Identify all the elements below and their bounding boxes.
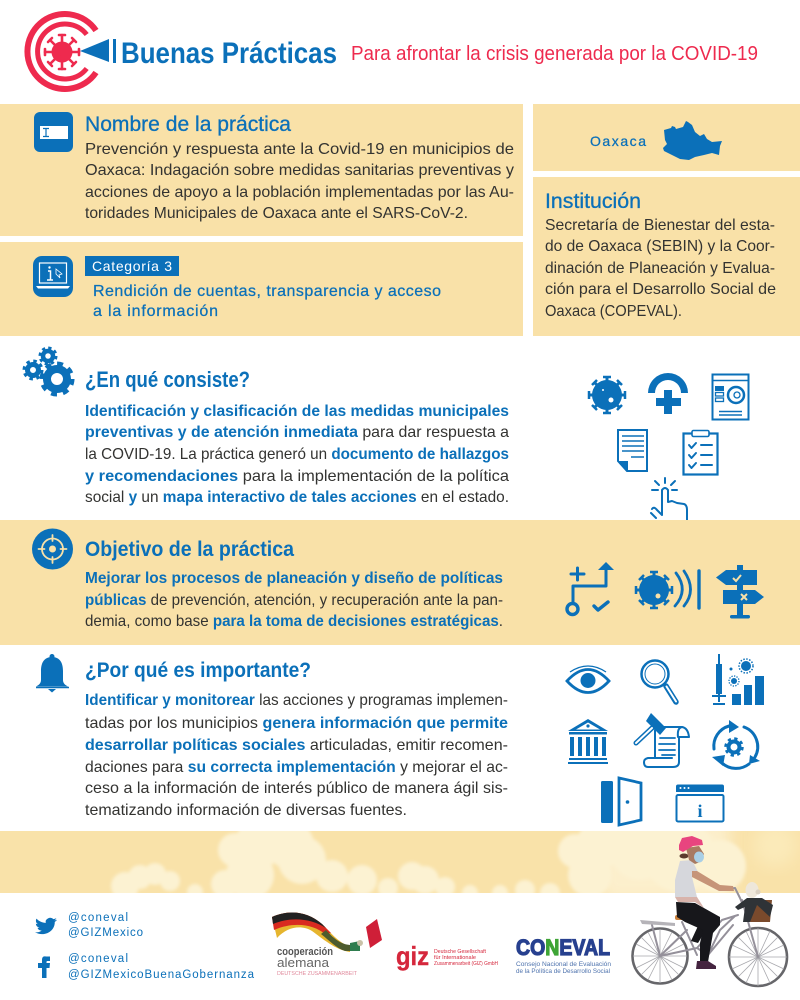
- text: institución body: Secretaría de Bienestar del esta-: [545, 217, 775, 234]
- text: nombre body: toridades Municipales de Oaxaca ante el SARS-CoV-2.: [85, 205, 468, 222]
- logo: giz: Zusammenarbeit (GIZ) GmbH: [434, 961, 498, 967]
- icon: gears: [24, 348, 72, 394]
- text: institución body: Oaxaca (COPEVAL).: [545, 303, 682, 320]
- logo: giz: giz: [396, 941, 429, 971]
- text: en qué consiste body: social y un mapa interactivo de tales acciones en el estado.: [85, 489, 509, 506]
- bicycle rack: [640, 920, 675, 926]
- logo: cooperación alemana: alemana: [277, 955, 330, 970]
- logo: cooperación alemana: DEUTSCHE ZUSAMMENARBEIT: [277, 971, 357, 977]
- heading: objetivo: Objetivo de la práctica: [85, 538, 294, 561]
- text: por qué body: tadas por los municipios genera información que permite: [85, 715, 508, 732]
- illustration: cyclist with dog: [632, 836, 787, 986]
- icon: text field: [34, 112, 73, 152]
- heading: en qué consiste: ¿En qué consiste?: [85, 367, 250, 392]
- icon: document: [618, 430, 647, 471]
- text: objetivo body: Mejorar los procesos de planeación y diseño de políticas: [85, 570, 503, 587]
- icon: info window: [676, 784, 724, 822]
- text: categoría name: Rendición de cuentas, transparencia y acceso: [93, 283, 441, 300]
- icon: magnifier: [642, 660, 676, 702]
- icon: bank: [568, 719, 608, 764]
- icon: open door: [601, 778, 641, 825]
- panel: objetivo: [0, 520, 800, 645]
- icon: virus with waves: [636, 571, 699, 608]
- panel: categoría: [0, 242, 523, 336]
- icon: syringe and chart: [712, 654, 764, 705]
- icon: pointing hand: [651, 478, 687, 520]
- header logo: virus target: [27, 14, 116, 89]
- logo: coneval: [516, 935, 611, 975]
- text: twitter handles: [68, 912, 143, 939]
- icon: gavel and scroll: [636, 713, 689, 767]
- rider shoe: [696, 961, 716, 969]
- text: facebook handles: @coneval: [68, 953, 128, 965]
- icon: Oaxaca map: [663, 121, 722, 160]
- text: por qué body: Identificar y monitorear las acciones y programas implemen-: [85, 692, 508, 709]
- icon: clipboard checklist: [684, 430, 718, 474]
- rider legs: [676, 902, 720, 962]
- icon: bell: [36, 654, 69, 692]
- logo: coneval: Consejo Nacional de Evaluación: [516, 962, 611, 968]
- icon: cycle gear: [712, 720, 760, 768]
- text: institución body: dinación de Planeación y Evalua-: [545, 260, 775, 277]
- logo: giz: [396, 941, 498, 971]
- icon: signpost: [716, 565, 764, 618]
- icon: health cross: [648, 373, 688, 414]
- logo: giz: Deutsche Gesellschaft: [434, 949, 487, 955]
- text: objetivo body: [85, 570, 503, 630]
- text: por qué body: [85, 692, 508, 819]
- heading: nombre: Nombre de la práctica: [85, 113, 291, 136]
- title: Buenas Prácticas: [121, 37, 337, 70]
- sash: [675, 897, 704, 908]
- logo: cooperación alemana: cooperación: [277, 946, 333, 958]
- text: nombre body: [85, 141, 514, 222]
- rider torso: [675, 860, 698, 897]
- panel: Oaxaca: [533, 104, 800, 171]
- text: categoría name: a la información: [93, 303, 218, 320]
- basket and dog: [735, 882, 773, 922]
- logo: coneval: CONEVAL: [516, 935, 610, 960]
- text: nombre body: Oaxaca: Indagación sobre medidas sanitarias preventivas y: [85, 162, 514, 179]
- logo: coneval: de la Política de Desarrollo Social: [516, 969, 610, 975]
- rider arm: [692, 871, 734, 891]
- icon: info window: i: [697, 801, 703, 821]
- rider neck and face: [686, 846, 704, 864]
- icon: route decisions: [567, 562, 614, 614]
- text: twitter handles: @coneval: [68, 912, 128, 924]
- text: facebook handles: @GIZMexicoBuenaGobernanza: [68, 969, 255, 981]
- icon: dashboard: [712, 374, 748, 420]
- icon: eye: [567, 666, 609, 692]
- rear wheel: [632, 928, 688, 984]
- icon: twitter: [35, 918, 57, 934]
- icon: facebook: [38, 956, 50, 978]
- heading: institución: Institución: [545, 190, 641, 213]
- text: nombre body: acciones de apoyo a la población implementadas por las Au-: [85, 184, 514, 201]
- subtitle: Para afrontar la crisis generada por la COVID-19: [351, 43, 758, 65]
- text: categoría name: [93, 283, 441, 320]
- text: institución body: do de Oaxaca (SEBIN) y la Coor-: [545, 238, 775, 255]
- logo: giz: für Internationale: [434, 955, 476, 961]
- bicycle seat: [675, 915, 683, 920]
- text: twitter handles: @GIZMexico: [68, 927, 143, 939]
- front wheel: [729, 928, 787, 986]
- text: objetivo body: públicas de prevención, atención, y recuperación ante la pan-: [85, 592, 503, 609]
- rider back leg: [691, 926, 706, 943]
- text: facebook handles: [68, 953, 255, 981]
- logo: cooperación alemana: [272, 913, 382, 977]
- icon: virus: [589, 377, 625, 413]
- text: en qué consiste body: [85, 403, 509, 506]
- text: en qué consiste body: Identificación y clasificación de las medidas municipales: [85, 403, 509, 420]
- label: Oaxaca: Oaxaca: [590, 133, 646, 149]
- text: por qué body: ceso a la información de interés público de manera ágil sis-: [85, 780, 508, 797]
- icon: target: [32, 528, 73, 570]
- bicycle frame: [652, 888, 758, 957]
- text: en qué consiste body: la COVID-19. La práctica generó un documento de hallazgos: [85, 446, 509, 463]
- text: en qué consiste body: preventivas y de atención inmediata para dar respuesta a: [85, 424, 509, 441]
- face mask: [694, 852, 704, 862]
- heading: por qué es importante: ¿Por qué es importante?: [85, 659, 311, 682]
- label: categoría 3: Categoría 3: [92, 258, 172, 274]
- text: objetivo body: demia, como base para la toma de decisiones estratégicas.: [85, 613, 503, 630]
- text: en qué consiste body: y recomendaciones para la implementación de la política: [85, 468, 509, 485]
- panel: institución: [533, 177, 800, 336]
- panel: cloud band: [0, 831, 800, 893]
- label: categoría 3: [85, 256, 179, 276]
- text: por qué body: daciones para su correcta implementación y mejorar el ac-: [85, 759, 508, 776]
- rider hair: [680, 854, 688, 858]
- text: por qué body: desarrollar políticas sociales articuladas, emitir recomen-: [85, 737, 508, 754]
- panel: nombre de la práctica: [0, 104, 523, 236]
- helmet: [679, 836, 703, 852]
- text: por qué body: tematizando información de diversas fuentes.: [85, 802, 407, 819]
- text: institución body: [545, 217, 776, 320]
- icon: laptop info: [33, 256, 73, 297]
- text: nombre body: Prevención y respuesta ante la Covid-19 en municipios de: [85, 141, 514, 158]
- text: institución body: ción para el Desarrollo Social de: [545, 281, 776, 298]
